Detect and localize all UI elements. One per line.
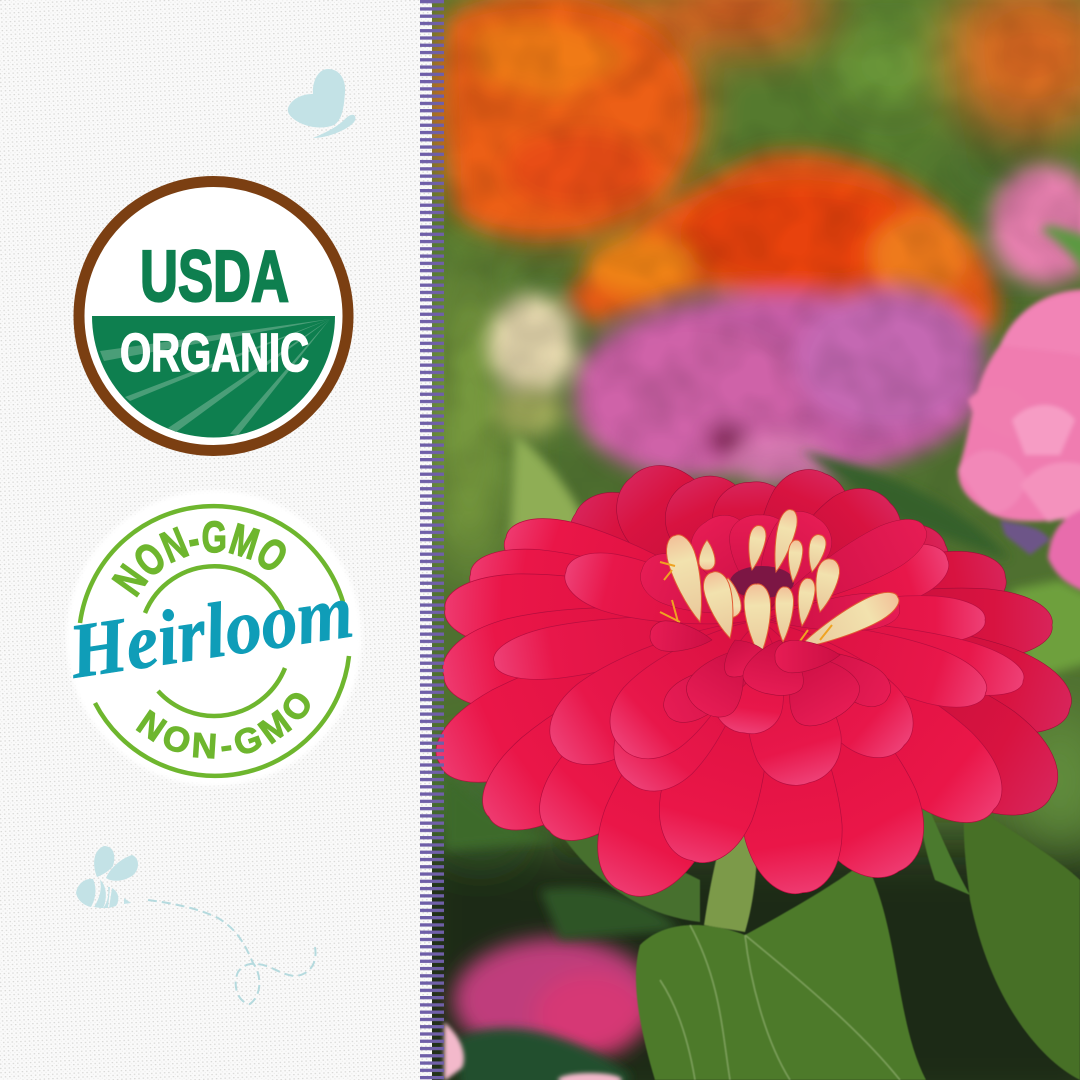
ORGANIC wordmark: ORGANIC (120, 323, 309, 383)
main zinnia flower (420, 447, 1080, 915)
outer petals (420, 504, 1023, 915)
bottom Non-GMO label: NON-GMO (136, 692, 310, 759)
mottled texture on blurred blooms (444, 0, 1080, 486)
foreground leaves and stem (555, 785, 1080, 1080)
striped purple divider (420, 0, 444, 1080)
USDA wordmark: USDA (140, 237, 289, 317)
photo background: blurred flowers and foliage (400, 0, 1080, 1080)
USDA organic badge (79, 182, 348, 450)
upper inner petals (633, 501, 935, 638)
outer and inner ring arcs (80, 506, 349, 776)
icon: butterfly (288, 69, 355, 138)
middle petals (490, 533, 1029, 810)
background pink flower (444, 289, 1080, 1080)
photo: zinnia flowers (400, 0, 1080, 1080)
top Non-GMO label: NON-GMO (111, 520, 286, 598)
icon: bee with dashed trail (76, 846, 316, 1004)
flower centre: maroon disc and cream florets (660, 508, 904, 660)
fabric panel (0, 0, 432, 1080)
Heirloom script: Heirloom (63, 567, 358, 695)
Non-GMO Heirloom badge (63, 488, 363, 787)
sun rays on field (100, 319, 330, 435)
back petals (553, 447, 1080, 841)
dashed flight path (148, 900, 316, 1004)
inner front petals (649, 619, 898, 736)
